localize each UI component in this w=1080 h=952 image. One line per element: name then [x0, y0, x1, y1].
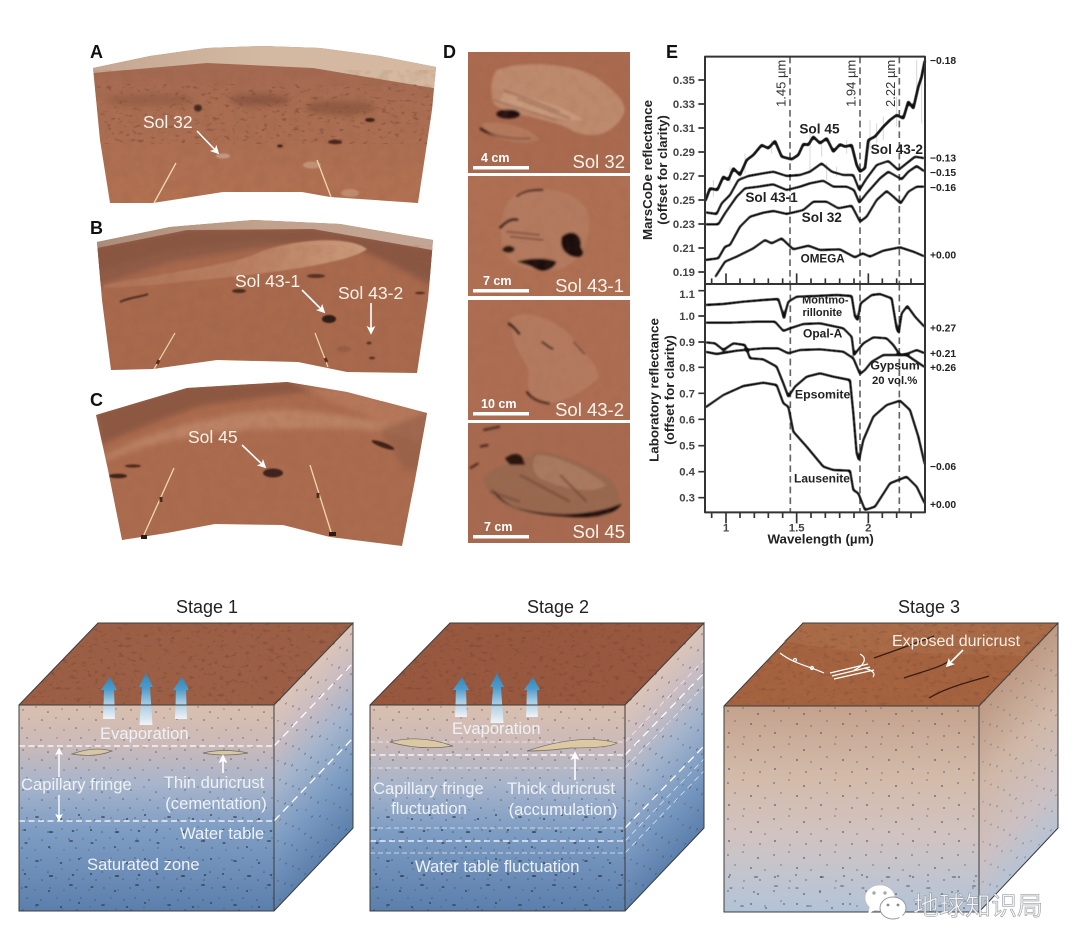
chart: MarsCoDe reflectance: 0.21 — [673, 243, 695, 255]
label: evaporation: Evaporation — [100, 724, 189, 743]
panel B: panorama Sol 43 — [88, 216, 440, 376]
scale label: 4 cm — [481, 151, 510, 165]
top surface — [724, 623, 1058, 706]
outlines: stage 1 and 2 — [19, 623, 704, 911]
dashed lines — [790, 284, 899, 512]
curve: Sol 45 — [705, 60, 925, 202]
scale bar — [473, 535, 529, 538]
chart: Laboratory reflectance: 0.7 — [679, 388, 695, 400]
mast feet — [141, 532, 336, 539]
block: Stage 3 — [724, 623, 1058, 912]
arrow: Sol 32 — [197, 131, 218, 153]
label: accumulation: (accumulation) — [509, 800, 617, 819]
ticks — [698, 291, 911, 523]
arrow: thin duricrust — [222, 756, 224, 773]
label: Sol 32: Sol 32 — [143, 112, 193, 132]
outline — [724, 623, 1058, 912]
chart: Laboratory reflectance: 0.3 — [679, 493, 695, 505]
panel D: close-up Sol 32 — [468, 52, 630, 173]
letter A: A — [90, 42, 103, 62]
chart: Laboratory reflectance: 0.9 — [679, 337, 695, 349]
top surface — [370, 623, 704, 705]
ticks — [698, 80, 911, 284]
mast markers — [157, 358, 327, 364]
y tick labels: 1.1 — [679, 289, 695, 301]
label: Sol 43-2: Sol 43-2 — [338, 283, 403, 303]
curve: Sol 32 — [705, 187, 925, 260]
chart: Laboratory reflectance: 0.6 — [679, 414, 695, 426]
chart: Laboratory reflectance: 20 vol.% — [872, 375, 917, 387]
rock body — [501, 189, 589, 271]
label: thick duricrust: Thick duricrust — [507, 779, 615, 798]
mast lines — [154, 160, 331, 203]
arrow: exposed duricrust — [947, 650, 963, 666]
letter E: E — [666, 42, 678, 62]
arrow: capillary fringe up — [58, 749, 60, 777]
x axis title: Wavelength (µm) — [767, 531, 874, 546]
chart: Laboratory reflectance: 0.8 — [679, 362, 695, 374]
chart: Laboratory reflectance: Lausenite — [794, 471, 850, 485]
chart: MarsCoDe reflectance: 0.27 — [673, 171, 695, 183]
y tick labels: 0.35 — [673, 75, 695, 87]
thin duricrust lenses — [72, 749, 248, 755]
mast lines — [143, 465, 332, 537]
scale bar — [473, 412, 529, 416]
chart: Laboratory reflectance: +0.26 — [930, 363, 956, 374]
panel C: panorama Sol 45 — [90, 380, 435, 550]
scale bar — [473, 289, 529, 292]
y axis title: Laboratory reflectance — [647, 318, 662, 462]
arrow: Sol 43-2 — [370, 303, 372, 333]
sol label: Sol 43-1 — [555, 275, 624, 296]
chart: Laboratory reflectance: Gypsum — [870, 358, 920, 372]
letter C: C — [90, 390, 103, 410]
letter D: D — [443, 42, 456, 62]
axes frame — [705, 284, 925, 512]
top surface — [19, 623, 353, 705]
labels: Stage 2 — [373, 719, 617, 876]
band labels: 1.45 µm — [774, 60, 789, 107]
curve: OMEGA — [715, 238, 925, 277]
sol label: Sol 45 — [573, 521, 625, 542]
curve: Opal-A — [705, 322, 925, 355]
scale label: 7 cm — [483, 274, 512, 288]
label: water table fluctuation: Water table fluctuation — [415, 857, 580, 876]
panel A: panorama Sol 32 — [88, 44, 440, 206]
chart: MarsCoDe reflectance: +0.00 — [930, 251, 956, 262]
watermark text: 地球知识局 — [913, 886, 1043, 923]
sol label: Sol 43-2 — [555, 399, 624, 420]
cracks — [874, 636, 989, 698]
dashed lines — [790, 57, 899, 284]
arrow: capillary fringe down — [58, 795, 60, 820]
chart: MarsCoDe reflectance: 1.94 µm — [844, 60, 859, 107]
scale label: 7 cm — [484, 520, 512, 534]
chart: MarsCoDe reflectance: Sol 43-1 — [745, 190, 798, 205]
front face — [724, 706, 979, 912]
curve: Sol 43-1 — [705, 166, 925, 224]
chart: Laboratory reflectance: Opal-A — [803, 326, 843, 340]
chart: MarsCoDe reflectance — [640, 56, 956, 284]
curve: Montmorillonite — [705, 294, 925, 333]
chart: MarsCoDe reflectance: 0.23 — [673, 219, 695, 231]
y axis title: MarsCoDe reflectance — [640, 100, 655, 240]
x tick labels: 1 — [723, 523, 729, 535]
rock body — [483, 452, 620, 516]
chart: Laboratory reflectance: Epsomite — [795, 388, 851, 402]
front face — [370, 705, 625, 911]
label: capillary fringe fluctuation: Capillary fringe — [373, 779, 484, 798]
chart: Laboratory reflectance — [647, 284, 956, 546]
block: Stage 1 — [19, 623, 353, 911]
offset labels: −0.18 — [930, 56, 956, 67]
curve labels: Montmo- — [802, 294, 849, 306]
sol label: Sol 32 — [573, 151, 625, 172]
y axis subtitle: (offset for clarity) — [662, 335, 677, 445]
labels: Stage 1 — [21, 724, 267, 874]
icon: chat watermark — [865, 885, 906, 921]
title: Stage 1: Stage 1 — [176, 597, 238, 617]
chart: MarsCoDe reflectance: −0.13 — [930, 154, 956, 165]
evaporation arrows — [453, 673, 540, 723]
chart: MarsCoDe reflectance: 0.19 — [673, 267, 695, 279]
front face — [19, 705, 274, 911]
thick duricrust lenses — [390, 739, 617, 751]
arrow: thick duricrust — [574, 753, 576, 780]
y axis subtitle: (offset for clarity) — [655, 115, 670, 225]
chart: Laboratory reflectance: +0.00 — [930, 500, 956, 511]
title: Stage 2: Stage 2 — [527, 597, 589, 617]
curve: Sol 43-2 — [705, 157, 925, 214]
chart: MarsCoDe reflectance: OMEGA — [801, 253, 845, 266]
chart: Laboratory reflectance: 0.4 — [679, 467, 696, 479]
chart: MarsCoDe reflectance: 0.29 — [673, 147, 695, 159]
curve: Gypsum — [705, 348, 925, 374]
mast markers — [161, 493, 318, 502]
chart: Laboratory reflectance: rillonite — [802, 307, 842, 319]
block: Stage 2 — [370, 623, 704, 911]
chart: MarsCoDe reflectance: Sol 32 — [802, 210, 842, 225]
chart: Laboratory reflectance: 2 — [865, 523, 871, 535]
panel D: close-up Sol 45 — [468, 423, 630, 543]
chart: MarsCoDe reflectance: −0.16 — [930, 183, 956, 194]
traverse track — [780, 653, 874, 679]
curve: Epsomite — [705, 342, 925, 465]
chart: MarsCoDe reflectance: 0.25 — [673, 195, 695, 207]
scale bar — [473, 166, 529, 170]
label: capillary fringe: Capillary fringe — [21, 775, 132, 794]
right face — [625, 623, 704, 911]
arrow: Sol 45 — [242, 445, 265, 467]
right face — [979, 623, 1058, 912]
chart: Laboratory reflectance: 1.5 — [789, 523, 805, 535]
mast lines — [154, 333, 328, 369]
chart: MarsCoDe reflectance: 0.31 — [673, 123, 695, 135]
chart: Laboratory reflectance: +0.21 — [930, 349, 956, 360]
noise spikes — [713, 60, 922, 197]
chart: MarsCoDe reflectance: 2.22 µm — [883, 60, 898, 107]
label: saturated zone: Saturated zone — [87, 855, 200, 874]
scale label: 10 cm — [481, 397, 516, 411]
chart: Laboratory reflectance: 0.5 — [679, 441, 695, 453]
label: exposed duricrust: Exposed duricrust — [892, 633, 1021, 650]
offset labels: +0.27 — [930, 324, 956, 335]
arrow: Sol 43-1 — [302, 290, 324, 312]
letter B: B — [90, 218, 103, 238]
evaporation arrows — [101, 673, 189, 725]
axes frame — [705, 57, 925, 284]
rock body — [510, 314, 598, 403]
label: cementation: (cementation) — [165, 794, 267, 813]
rock body — [491, 64, 624, 135]
curve: Lausenite — [705, 383, 925, 510]
label: Sol 43-1: Sol 43-1 — [235, 271, 300, 291]
chart: MarsCoDe reflectance: Sol 43-2 — [871, 142, 923, 157]
panel D: close-up Sol 43-1 — [468, 176, 630, 296]
label: Sol 45: Sol 45 — [188, 427, 238, 447]
chart: MarsCoDe reflectance: −0.15 — [930, 168, 956, 179]
label: evaporation: Evaporation — [452, 719, 541, 738]
curve labels: Sol 45 — [799, 121, 840, 136]
label: thin duricrust: Thin duricrust — [164, 773, 265, 792]
label: fluctuation: fluctuation — [391, 799, 467, 818]
chart: Laboratory reflectance: −0.06 — [930, 462, 956, 473]
chart: MarsCoDe reflectance: 0.33 — [673, 99, 695, 111]
chart: Laboratory reflectance: 1.0 — [679, 311, 695, 323]
panel D: close-up Sol 43-2 — [468, 300, 630, 420]
right face — [274, 623, 353, 911]
label: water table: Water table — [180, 824, 264, 843]
title: Stage 3: Stage 3 — [898, 597, 960, 617]
